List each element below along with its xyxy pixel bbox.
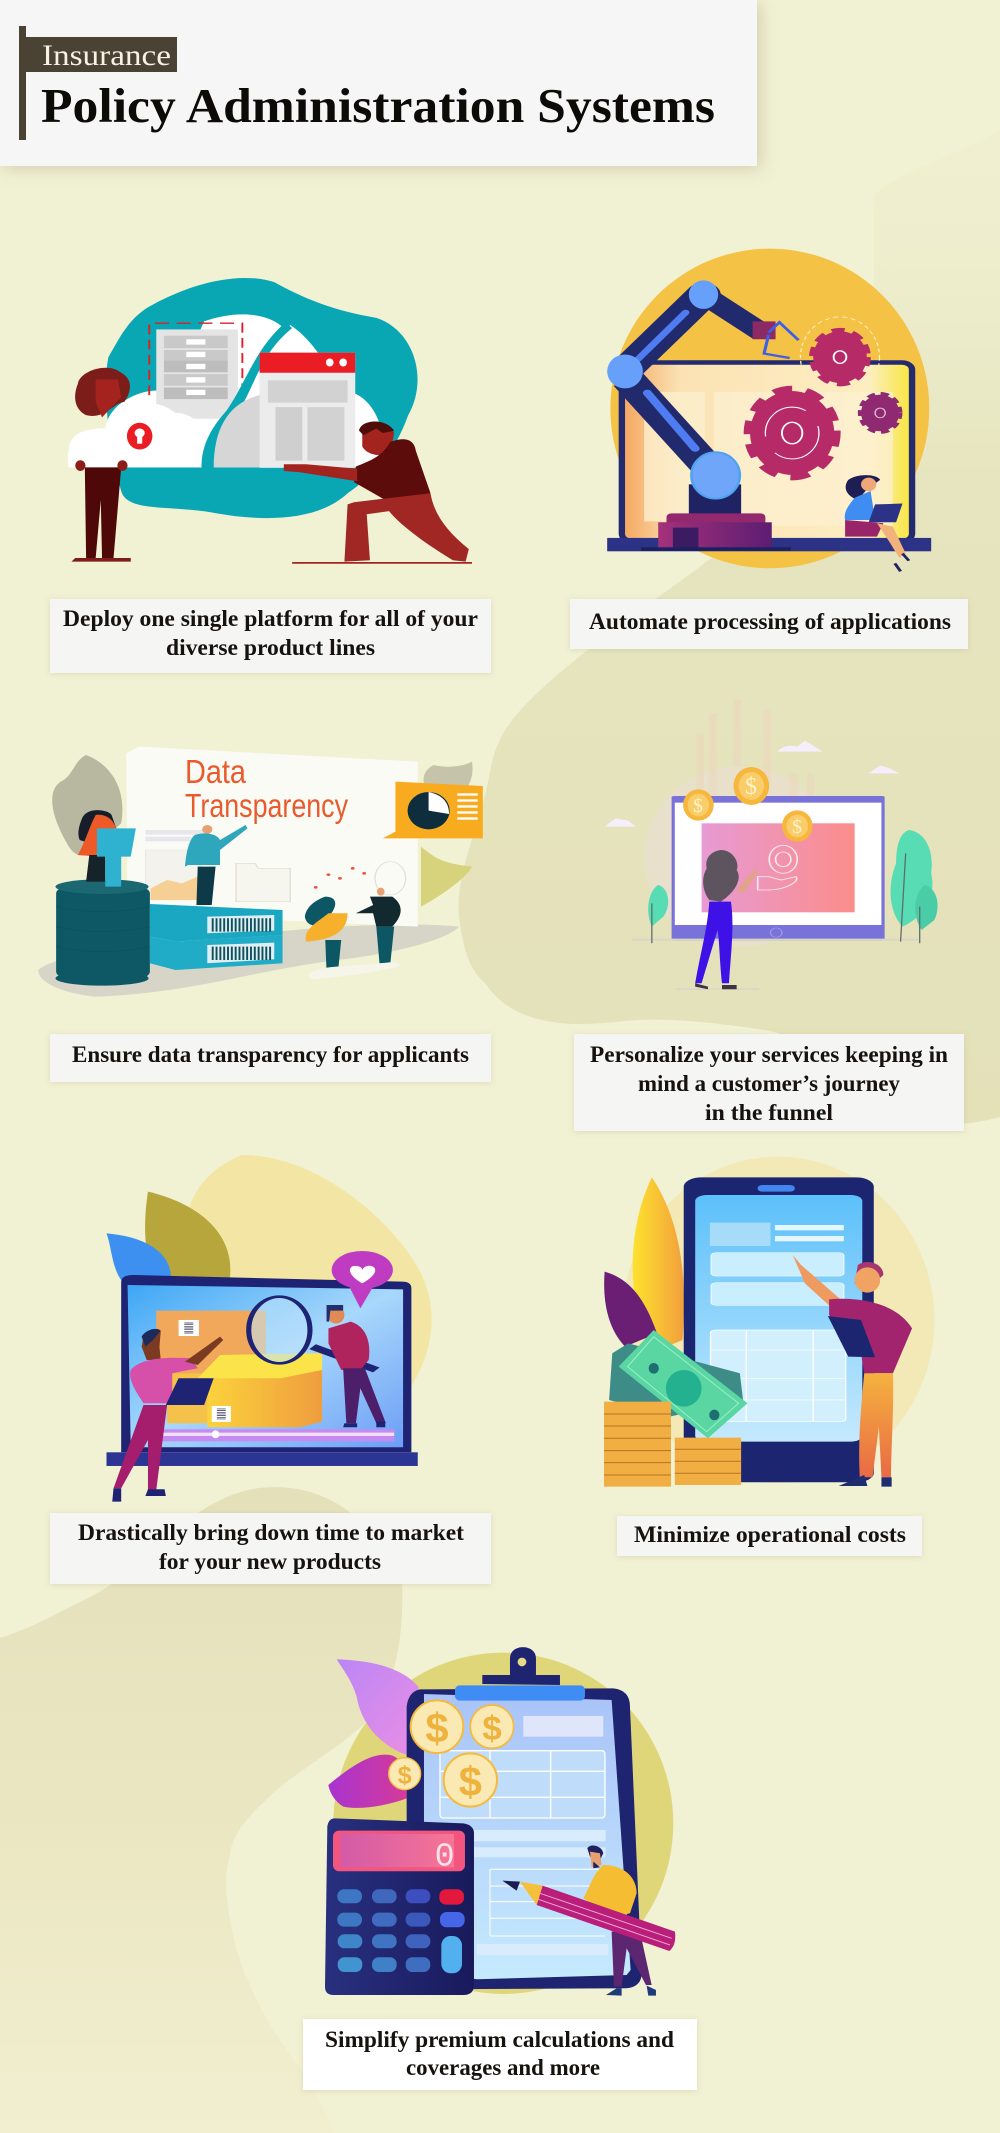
pale yellow oval	[622, 1157, 934, 1483]
leaves	[52, 755, 473, 907]
server rack	[156, 329, 238, 419]
woman at lectern	[78, 810, 136, 887]
panel: single platform illustration	[68, 278, 472, 564]
blue leaf	[107, 1233, 171, 1280]
presentation board	[126, 747, 418, 927]
coin 3	[444, 1753, 497, 1807]
yellow circle	[610, 249, 929, 568]
grey database	[214, 393, 281, 467]
coins	[683, 767, 813, 842]
keyhole badge	[127, 423, 152, 450]
gradient panel	[702, 823, 855, 912]
lilac leaf	[337, 1659, 419, 1755]
red dashed frame	[149, 323, 242, 395]
man in dark top	[356, 888, 401, 963]
caption: deploy platform: diverse product lines	[166, 635, 375, 660]
illustration title	[185, 753, 348, 824]
gear hand icon	[758, 845, 797, 890]
yellow woman	[305, 897, 348, 972]
board contents	[145, 830, 406, 902]
caption: operational costs	[617, 1516, 922, 1556]
coin dollar signs	[693, 774, 802, 838]
panel: automation illustration	[607, 249, 931, 571]
coin dollar signs: $	[792, 816, 802, 838]
left white cloud	[69, 314, 284, 467]
right man	[327, 1305, 386, 1427]
caption: deploy platform: Deploy one single platform for all of your	[63, 606, 478, 631]
calculator	[325, 1818, 474, 1995]
teal cloud blob	[106, 278, 418, 518]
coin 2: $	[482, 1710, 502, 1748]
panel: operational costs illustration	[604, 1157, 934, 1487]
left man with laptop	[112, 1329, 223, 1502]
background blob: right	[459, 130, 1000, 1124]
progress bar	[163, 1429, 394, 1441]
top gear	[800, 317, 880, 397]
table on phone	[711, 1330, 846, 1422]
large gear	[749, 389, 836, 477]
pale yellow oval	[185, 1155, 432, 1407]
caption: premium calculations: coverages and more	[406, 2055, 600, 2080]
caption: personalize services: Personalize your services keeping in	[590, 1042, 948, 1067]
heart bubble	[332, 1251, 393, 1308]
paper fields	[523, 1716, 603, 1737]
coin 4: $	[398, 1761, 412, 1789]
woman holding cloud	[71, 368, 131, 562]
caption: personalize services: in the funnel	[705, 1100, 833, 1125]
coin dollar signs: $	[745, 774, 757, 800]
coin 3: $	[459, 1758, 482, 1805]
panel: personalize illustration	[605, 700, 938, 990]
laptop frame	[121, 1275, 411, 1452]
tablet screen	[675, 803, 881, 925]
pencil	[502, 1881, 675, 1951]
background blob: lower left	[0, 1487, 402, 2133]
man with tablet	[793, 1255, 912, 1487]
purple leaf	[604, 1272, 657, 1347]
laptop frame	[622, 362, 912, 541]
coin stacks	[604, 1402, 741, 1487]
laptop screen panels	[644, 392, 893, 526]
caption: personalize services	[574, 1034, 964, 1131]
white ground patch	[309, 962, 402, 979]
caption: time to market: for your new products	[159, 1549, 381, 1574]
header accent bar	[19, 26, 26, 140]
coin 4	[389, 1758, 421, 1790]
faint pink bars	[696, 700, 814, 813]
caption: personalize services: mind a customer’s journey	[638, 1071, 900, 1096]
caption: premium calculations	[303, 2019, 697, 2090]
tablet frame	[672, 796, 885, 941]
woman pointing	[695, 850, 757, 989]
database cylinder	[55, 879, 150, 986]
browser window	[260, 353, 355, 468]
caption: data transparency	[50, 1034, 491, 1082]
caption: automate processing: Automate processing of applications	[589, 609, 951, 634]
small gear	[860, 394, 900, 432]
magenta leaf	[328, 1755, 407, 1808]
man pushing window	[284, 422, 472, 564]
illustration title: Data	[185, 753, 247, 790]
faint backdrop circle	[644, 767, 836, 947]
caption: premium calculations: Simplify premium calculations and	[325, 2027, 674, 2052]
woman with laptop	[845, 475, 909, 571]
calculator display: 0	[435, 1838, 455, 1876]
left white cloud foreground	[68, 403, 206, 467]
clipboard body	[407, 1688, 642, 1989]
illustration title: Transparency	[185, 787, 348, 824]
red data dots	[314, 867, 366, 889]
server units	[150, 904, 283, 970]
panel: time to market illustration	[107, 1155, 432, 1502]
coin 2	[470, 1705, 514, 1748]
caption: automate processing	[570, 599, 968, 649]
tablet button	[770, 928, 782, 937]
coin dollar signs: $	[693, 795, 703, 817]
man pointing	[185, 825, 247, 905]
phone body	[684, 1177, 874, 1482]
olive circle	[333, 1653, 673, 1994]
ground line	[631, 939, 918, 941]
robot pedestal	[641, 513, 791, 551]
yellow leaf	[633, 1177, 684, 1353]
form fields	[710, 1223, 844, 1305]
laptop screen	[128, 1285, 403, 1447]
orange callout	[383, 782, 483, 838]
caption: operational costs: Minimize operational costs	[634, 1522, 906, 1547]
coin 1	[411, 1700, 463, 1753]
clouds	[605, 741, 899, 827]
coin 1: $	[425, 1705, 449, 1752]
header panel	[0, 0, 757, 166]
magnifier	[249, 1297, 376, 1370]
caption: time to market	[50, 1513, 491, 1584]
phone screen	[695, 1195, 862, 1442]
clipboard paper	[424, 1694, 631, 1979]
teal swoosh divider	[202, 322, 292, 469]
clipboard clip	[455, 1647, 585, 1701]
caption: time to market: Drastically bring down time to market	[78, 1520, 464, 1545]
phone notch	[758, 1185, 795, 1192]
caption: deploy platform	[50, 599, 491, 673]
title: Policy Administration Systems	[41, 78, 715, 133]
robot arm	[607, 280, 799, 516]
olive leaf	[145, 1192, 230, 1280]
right white cloud	[217, 325, 384, 467]
panel: premium calculations illustration	[325, 1647, 675, 1996]
ground shadow	[38, 925, 459, 997]
panel: data transparency illustration	[38, 747, 483, 997]
laptop base	[607, 538, 931, 551]
label: Insurance: Insurance	[42, 39, 171, 72]
caption: data transparency: Ensure data transparency for applicants	[72, 1042, 469, 1067]
man	[583, 1845, 656, 1996]
cardboard box	[156, 1311, 322, 1427]
calculator display	[333, 1831, 465, 1876]
trees	[648, 830, 938, 943]
calculator keys	[337, 1889, 465, 1973]
laptop base	[107, 1452, 418, 1466]
bank notes	[609, 1330, 748, 1438]
